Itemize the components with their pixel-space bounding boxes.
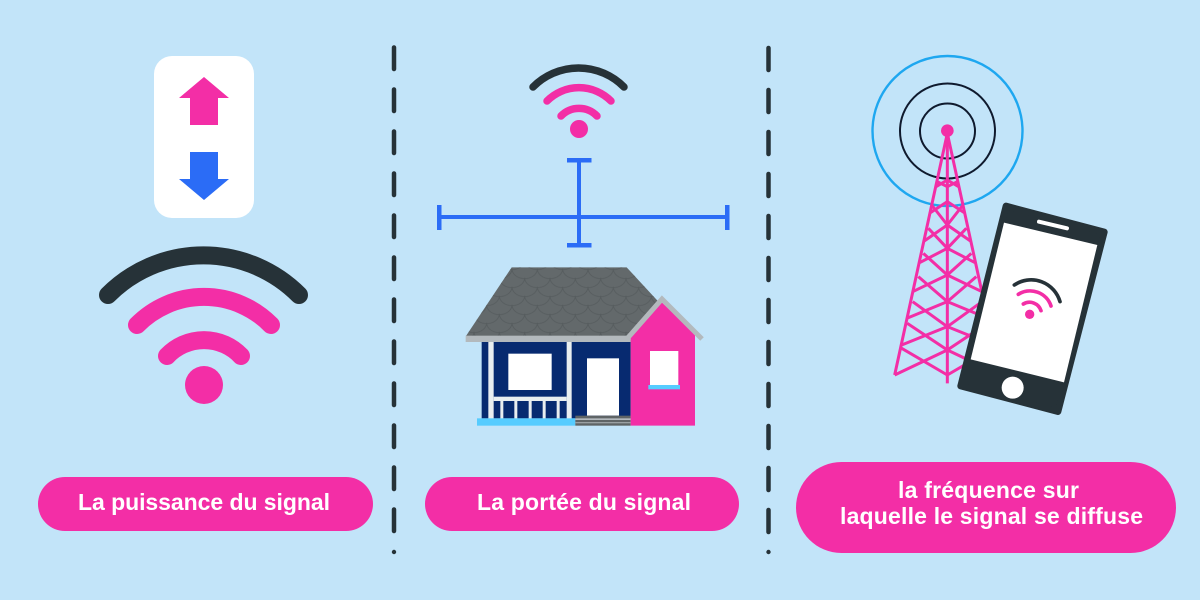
icon: phone wifi symbol (1014, 280, 1060, 319)
icon: house (466, 267, 702, 426)
label: signal frequency (796, 462, 1176, 553)
label: signal frequency: la fréquence sur (898, 477, 1079, 503)
divider: left dashed line (392, 48, 396, 554)
label: signal strength: La puissance du signal (78, 489, 330, 515)
panel: signal frequency (796, 56, 1176, 553)
panel: signal range (425, 68, 739, 531)
panel: signal strength (38, 56, 373, 531)
icon: range cross (437, 158, 730, 248)
icon: large wifi symbol (108, 255, 299, 404)
label: signal frequency: laquelle le signal se diffuse (840, 503, 1143, 529)
icon: broadcast waves (872, 56, 1022, 206)
icon: antenna tower (895, 124, 1000, 383)
label: signal range: La portée du signal (477, 489, 691, 515)
label: signal range (425, 477, 739, 531)
icon: up and down arrows card (154, 56, 254, 218)
label: signal strength (38, 477, 373, 531)
divider: right dashed line (766, 48, 771, 554)
icon: small wifi symbol (533, 68, 624, 138)
icon: smartphone (961, 206, 1104, 412)
